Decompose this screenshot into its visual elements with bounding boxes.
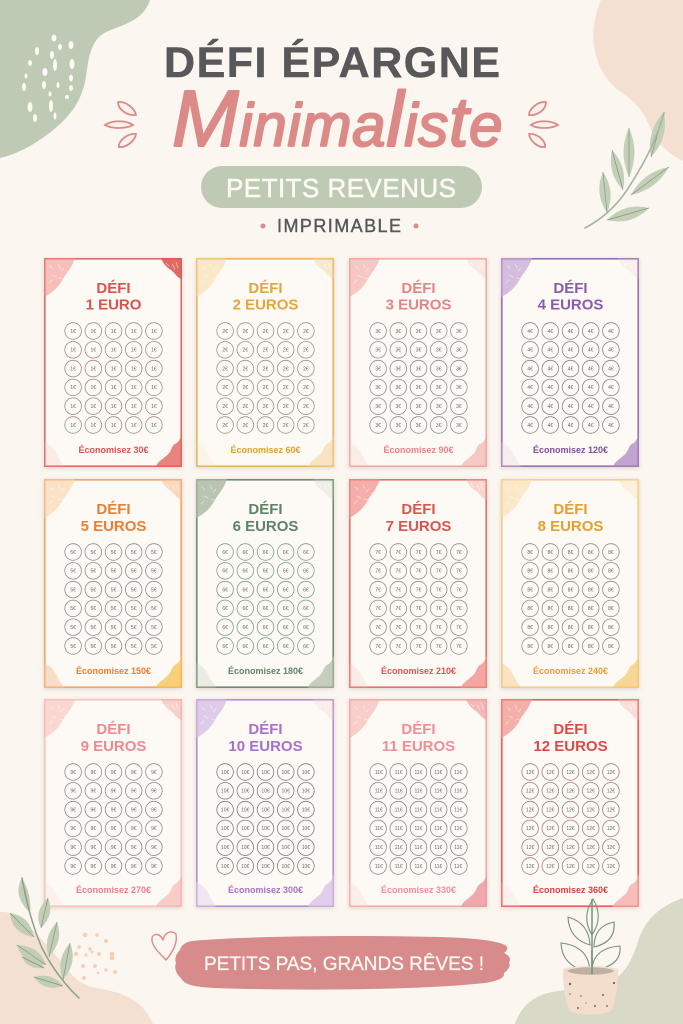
title: DÉFI bbox=[553, 721, 588, 738]
coin grid: 4€ 4€ 4€ 4€ 4€ bbox=[527, 366, 614, 372]
blob: bottom right sage bbox=[515, 898, 683, 1024]
coin grid: 2€ 2€ 2€ 2€ 2€ bbox=[222, 348, 309, 354]
savings total: Économisez 90€ bbox=[383, 445, 454, 455]
icon: potted plant bbox=[561, 899, 620, 1014]
title: DÉFI bbox=[96, 280, 131, 297]
savings total: Économisez 240€ bbox=[533, 666, 608, 676]
coin grid: 6€ 6€ 6€ 6€ 6€ bbox=[222, 606, 309, 612]
subtitle: imprimable: IMPRIMABLE bbox=[277, 216, 401, 236]
coin grid: 7€ 7€ 7€ 7€ 7€ bbox=[375, 644, 462, 650]
coin grid: 7€ 7€ 7€ 7€ 7€ bbox=[375, 587, 462, 593]
coin grid: 9€ 9€ 9€ 9€ 9€ bbox=[70, 864, 157, 870]
coin grid: 5€ 5€ 5€ 5€ 5€ bbox=[70, 569, 157, 575]
blob: top left green with white speckles bbox=[0, 0, 150, 158]
title: 3 EUROS bbox=[386, 296, 451, 314]
coin grid: 5€ 5€ 5€ 5€ 5€ bbox=[70, 644, 157, 650]
coin grid: 5€ 5€ 5€ 5€ 5€ bbox=[70, 606, 157, 612]
coin grid: 2€ 2€ 2€ 2€ 2€ bbox=[222, 423, 309, 429]
badge: petits revenus: PETITS REVENUS bbox=[226, 173, 456, 203]
title: 8 EUROS bbox=[538, 518, 603, 535]
coin grid: 3€ 3€ 3€ 3€ 3€ bbox=[375, 423, 462, 429]
title: DÉFI bbox=[96, 501, 131, 518]
coin grid: 12€ 12€ 12€ 12€ 12€ bbox=[526, 807, 615, 813]
blob: top right peach bbox=[593, 0, 683, 161]
coin grid: 5€ 5€ 5€ 5€ 5€ bbox=[70, 625, 157, 631]
coin grid: 1€ 1€ 1€ 1€ 1€ bbox=[70, 329, 157, 335]
savings total: Économisez 150€ bbox=[76, 666, 151, 676]
coin grid: 12€ 12€ 12€ 12€ 12€ bbox=[526, 845, 615, 851]
coin grid: 7€ 7€ 7€ 7€ 7€ bbox=[375, 550, 462, 556]
decorative peach dots bbox=[74, 933, 117, 980]
savings total: Économisez 180€ bbox=[228, 666, 303, 676]
title: 5 EUROS bbox=[81, 518, 146, 535]
title: 10 EUROS bbox=[228, 738, 303, 755]
coin grid bbox=[217, 764, 314, 874]
coin grid bbox=[370, 764, 467, 874]
coin grid: 2€ 2€ 2€ 2€ 2€ bbox=[222, 366, 309, 372]
title: 2 EUROS bbox=[233, 296, 298, 314]
coin grid bbox=[65, 323, 162, 433]
savings total: Économisez 120€ bbox=[533, 445, 608, 455]
coin grid: 8€ 8€ 8€ 8€ 8€ bbox=[527, 606, 614, 612]
card: défi 3 euros bbox=[349, 258, 487, 467]
coin grid: 8€ 8€ 8€ 8€ 8€ bbox=[527, 644, 614, 650]
card: défi 5 euros bbox=[44, 479, 182, 688]
coin grid: 6€ 6€ 6€ 6€ 6€ bbox=[222, 625, 309, 631]
blob: bottom left peach bbox=[0, 912, 153, 1024]
savings total: Économisez 30€ bbox=[78, 445, 149, 455]
card: défi 4 euros bbox=[501, 258, 639, 467]
title: DÉFI bbox=[401, 280, 436, 297]
coin grid: 7€ 7€ 7€ 7€ 7€ bbox=[375, 569, 462, 575]
coin grid: 11€ 11€ 11€ 11€ 11€ bbox=[375, 789, 462, 795]
savings total: Économisez 300€ bbox=[228, 885, 303, 895]
title: 1 EURO bbox=[86, 296, 142, 314]
coin grid: 9€ 9€ 9€ 9€ 9€ bbox=[70, 845, 157, 851]
coin grid bbox=[217, 544, 314, 654]
card: défi 1 euro bbox=[44, 258, 182, 467]
coin grid: 1€ 1€ 1€ 1€ 1€ bbox=[70, 404, 157, 410]
savings total: Économisez 210€ bbox=[381, 666, 456, 676]
title: 12 EUROS bbox=[533, 738, 608, 755]
coin grid: 9€ 9€ 9€ 9€ 9€ bbox=[70, 770, 157, 776]
title: DÉFI bbox=[401, 501, 436, 518]
coin grid: 2€ 2€ 2€ 2€ 2€ bbox=[222, 329, 309, 335]
coin grid: 4€ 4€ 4€ 4€ 4€ bbox=[527, 385, 614, 391]
savings total: Économisez 330€ bbox=[381, 885, 456, 895]
badge: petits revenus bbox=[201, 166, 482, 208]
coin grid: 7€ 7€ 7€ 7€ 7€ bbox=[375, 606, 462, 612]
title: DÉFI bbox=[401, 721, 436, 738]
coin grid: 8€ 8€ 8€ 8€ 8€ bbox=[527, 587, 614, 593]
title: DÉFI bbox=[553, 501, 588, 518]
title: DÉFI bbox=[248, 721, 283, 738]
coin grid: 3€ 3€ 3€ 3€ 3€ bbox=[375, 404, 462, 410]
coin grid bbox=[522, 544, 619, 654]
coin grid: 4€ 4€ 4€ 4€ 4€ bbox=[527, 423, 614, 429]
coin grid: 10€ 10€ 10€ 10€ 10€ bbox=[221, 826, 310, 832]
coin grid: 9€ 9€ 9€ 9€ 9€ bbox=[70, 826, 157, 832]
savings total: Économisez 360€ bbox=[533, 885, 608, 895]
banner: petits pas, grands rêves bbox=[175, 936, 510, 990]
coin grid: 6€ 6€ 6€ 6€ 6€ bbox=[222, 587, 309, 593]
coin grid: 12€ 12€ 12€ 12€ 12€ bbox=[526, 789, 615, 795]
coin grid: 11€ 11€ 11€ 11€ 11€ bbox=[375, 770, 462, 776]
savings total: Économisez 60€ bbox=[230, 445, 301, 455]
coin grid: 1€ 1€ 1€ 1€ 1€ bbox=[70, 366, 157, 372]
coin grid: 4€ 4€ 4€ 4€ 4€ bbox=[527, 329, 614, 335]
coin grid: 6€ 6€ 6€ 6€ 6€ bbox=[222, 550, 309, 556]
coin grid: 6€ 6€ 6€ 6€ 6€ bbox=[222, 644, 309, 650]
coin grid: 5€ 5€ 5€ 5€ 5€ bbox=[70, 587, 157, 593]
coin grid bbox=[217, 323, 314, 433]
coin grid: 11€ 11€ 11€ 11€ 11€ bbox=[375, 864, 462, 870]
coin grid: 10€ 10€ 10€ 10€ 10€ bbox=[221, 807, 310, 813]
coin grid: 9€ 9€ 9€ 9€ 9€ bbox=[70, 789, 157, 795]
coin grid: 1€ 1€ 1€ 1€ 1€ bbox=[70, 423, 157, 429]
coin grid: 8€ 8€ 8€ 8€ 8€ bbox=[527, 569, 614, 575]
card: défi 6 euros bbox=[196, 479, 334, 688]
coin grid: 3€ 3€ 3€ 3€ 3€ bbox=[375, 348, 462, 354]
coin grid: 2€ 2€ 2€ 2€ 2€ bbox=[222, 404, 309, 410]
coin grid: 11€ 11€ 11€ 11€ 11€ bbox=[375, 807, 462, 813]
coin grid: 11€ 11€ 11€ 11€ 11€ bbox=[375, 826, 462, 832]
banner: petits pas, grands rêves: PETITS PAS, GRANDS RÊVES ! bbox=[204, 953, 484, 975]
icon: heart outline bbox=[152, 932, 176, 960]
coin grid bbox=[65, 544, 162, 654]
coin grid: 8€ 8€ 8€ 8€ 8€ bbox=[527, 550, 614, 556]
card: défi 7 euros bbox=[349, 479, 487, 688]
coin grid: 7€ 7€ 7€ 7€ 7€ bbox=[375, 625, 462, 631]
icon: top right leaf branch bbox=[585, 112, 669, 228]
title: 7 EUROS bbox=[386, 518, 451, 535]
coin grid: 4€ 4€ 4€ 4€ 4€ bbox=[527, 404, 614, 410]
coin grid: 11€ 11€ 11€ 11€ 11€ bbox=[375, 845, 462, 851]
coin grid: 10€ 10€ 10€ 10€ 10€ bbox=[221, 789, 310, 795]
coin grid: 3€ 3€ 3€ 3€ 3€ bbox=[375, 366, 462, 372]
coin grid: 2€ 2€ 2€ 2€ 2€ bbox=[222, 385, 309, 391]
coin grid: 12€ 12€ 12€ 12€ 12€ bbox=[526, 826, 615, 832]
card: défi 9 euros bbox=[44, 699, 182, 907]
coin grid: 9€ 9€ 9€ 9€ 9€ bbox=[70, 807, 157, 813]
title: 9 EUROS bbox=[81, 738, 146, 755]
card: défi 12 euros bbox=[501, 699, 639, 907]
coin grid bbox=[65, 764, 162, 874]
coin grid: 10€ 10€ 10€ 10€ 10€ bbox=[221, 864, 310, 870]
card: défi 8 euros bbox=[501, 479, 639, 688]
coin grid bbox=[522, 764, 619, 874]
title: DÉFI bbox=[96, 721, 131, 738]
coin grid bbox=[370, 323, 467, 433]
icon: bottom left leaf branch bbox=[10, 878, 79, 998]
coin grid: 1€ 1€ 1€ 1€ 1€ bbox=[70, 348, 157, 354]
coin grid: 10€ 10€ 10€ 10€ 10€ bbox=[221, 845, 310, 851]
icon: left accent petals bbox=[105, 102, 136, 147]
coin grid: 10€ 10€ 10€ 10€ 10€ bbox=[221, 770, 310, 776]
title: DÉFI bbox=[553, 280, 588, 297]
coin grid: 5€ 5€ 5€ 5€ 5€ bbox=[70, 550, 157, 556]
savings total: Économisez 270€ bbox=[76, 885, 151, 895]
title: 6 EUROS bbox=[233, 518, 298, 535]
title: DÉFI bbox=[248, 501, 283, 518]
title: 11 EUROS bbox=[382, 738, 455, 755]
coin grid bbox=[370, 544, 467, 654]
coin grid: 8€ 8€ 8€ 8€ 8€ bbox=[527, 625, 614, 631]
card: défi 11 euros bbox=[349, 699, 487, 907]
coin grid: 4€ 4€ 4€ 4€ 4€ bbox=[527, 348, 614, 354]
coin grid bbox=[522, 323, 619, 433]
coin grid: 1€ 1€ 1€ 1€ 1€ bbox=[70, 385, 157, 391]
coin grid: 3€ 3€ 3€ 3€ 3€ bbox=[375, 329, 462, 335]
title: 4 EUROS bbox=[538, 296, 603, 314]
coin grid: 3€ 3€ 3€ 3€ 3€ bbox=[375, 385, 462, 391]
coin grid: 6€ 6€ 6€ 6€ 6€ bbox=[222, 569, 309, 575]
icon: right accent petals bbox=[529, 102, 558, 147]
card: défi 10 euros bbox=[196, 699, 334, 907]
coin grid: 12€ 12€ 12€ 12€ 12€ bbox=[526, 770, 615, 776]
title: DÉFI bbox=[248, 280, 283, 297]
card: défi 2 euros bbox=[196, 258, 334, 467]
heading: Défi Épargne: DÉFI ÉPARGNE bbox=[164, 39, 500, 87]
heading: Minimaliste script: Minimaliste bbox=[172, 74, 503, 163]
coin grid: 12€ 12€ 12€ 12€ 12€ bbox=[526, 864, 615, 870]
